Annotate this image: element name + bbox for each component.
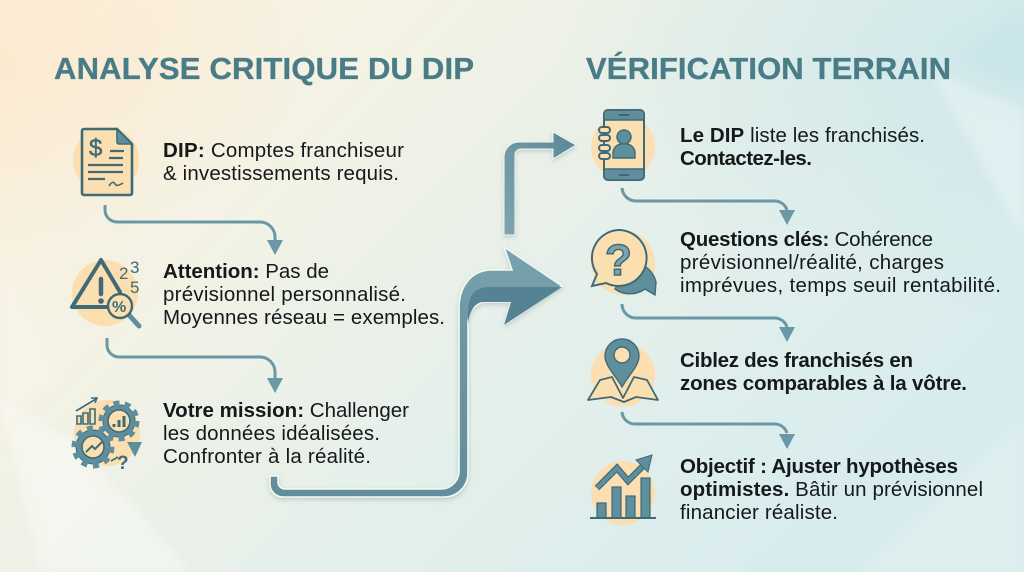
icon: warning and magnifier (72, 258, 139, 326)
text: key questions (680, 228, 1001, 297)
title: vérification terrain: VÉRIFICATION TERRAIN (586, 51, 951, 86)
icon: question bubbles (591, 230, 656, 295)
arrow: contact to questions (622, 188, 795, 225)
title: analyse critique du DIP: ANALYSE CRITIQUE DU DIP (54, 51, 474, 86)
arrow: targeting to objective (622, 412, 795, 449)
text: objective (680, 455, 983, 524)
arrow: large transition arrow (270, 247, 562, 497)
text: key questions: imprévues, temps seuil rentabilité. (680, 274, 1001, 297)
text: DIP: DIP: Comptes franchiseur (163, 139, 404, 162)
icon: warning and magnifier: 2 (119, 264, 128, 283)
text: target franchisees: Ciblez des franchisés en (680, 349, 913, 372)
icon: financial document (73, 127, 139, 195)
text: attention: prévisionnel personnalisé. (163, 283, 406, 306)
text: objective: financier réaliste. (680, 501, 838, 524)
arrow: small upper arrow (504, 132, 576, 235)
text: attention (163, 260, 445, 329)
icon: financial document: $ (89, 135, 102, 162)
text: mission: les données idéalisées. (163, 422, 380, 445)
text: mission: Confronter à la réalité. (163, 445, 371, 468)
text: attention: Attention: Pas de (163, 260, 329, 283)
arrow: attention to mission (107, 338, 283, 393)
text: contact franchisees: Contactez-les. (680, 147, 812, 170)
text: mission (163, 399, 409, 468)
text: key questions: Questions clés: Cohérence (680, 228, 933, 251)
text: key questions: prévisionnel/réalité, charges (680, 251, 944, 274)
icon: rising bar chart (590, 455, 656, 525)
icon: warning and magnifier: 5 (130, 278, 139, 297)
icon: gears and chart: ? (117, 453, 129, 474)
icon: gears and chart (74, 398, 142, 474)
icon: question bubbles: ? (605, 236, 632, 285)
text: mission: Votre mission: Challenger (163, 399, 409, 422)
text: attention: Moyennes réseau = exemples. (163, 306, 445, 329)
text: contact franchisees (680, 124, 925, 170)
text: contact franchisees: Le DIP liste les franchisés. (680, 124, 925, 147)
text: target franchisees (680, 349, 967, 395)
text: DIP (163, 139, 404, 185)
icon: map pin (588, 339, 658, 407)
icon: phone contacts (591, 110, 655, 180)
text: objective: Objectif : Ajuster hypothèses (680, 455, 958, 478)
text: objective: optimistes. Bâtir un prévisionnel (680, 478, 983, 501)
arrow: questions to targeting (622, 304, 795, 342)
arrow: DIP to attention (105, 205, 283, 255)
icon: warning and magnifier: 3 (130, 258, 139, 277)
text: target franchisees: zones comparables à la vôtre. (680, 372, 967, 395)
icon: warning and magnifier: % (112, 299, 126, 316)
text: DIP: & investissements requis. (163, 162, 399, 185)
